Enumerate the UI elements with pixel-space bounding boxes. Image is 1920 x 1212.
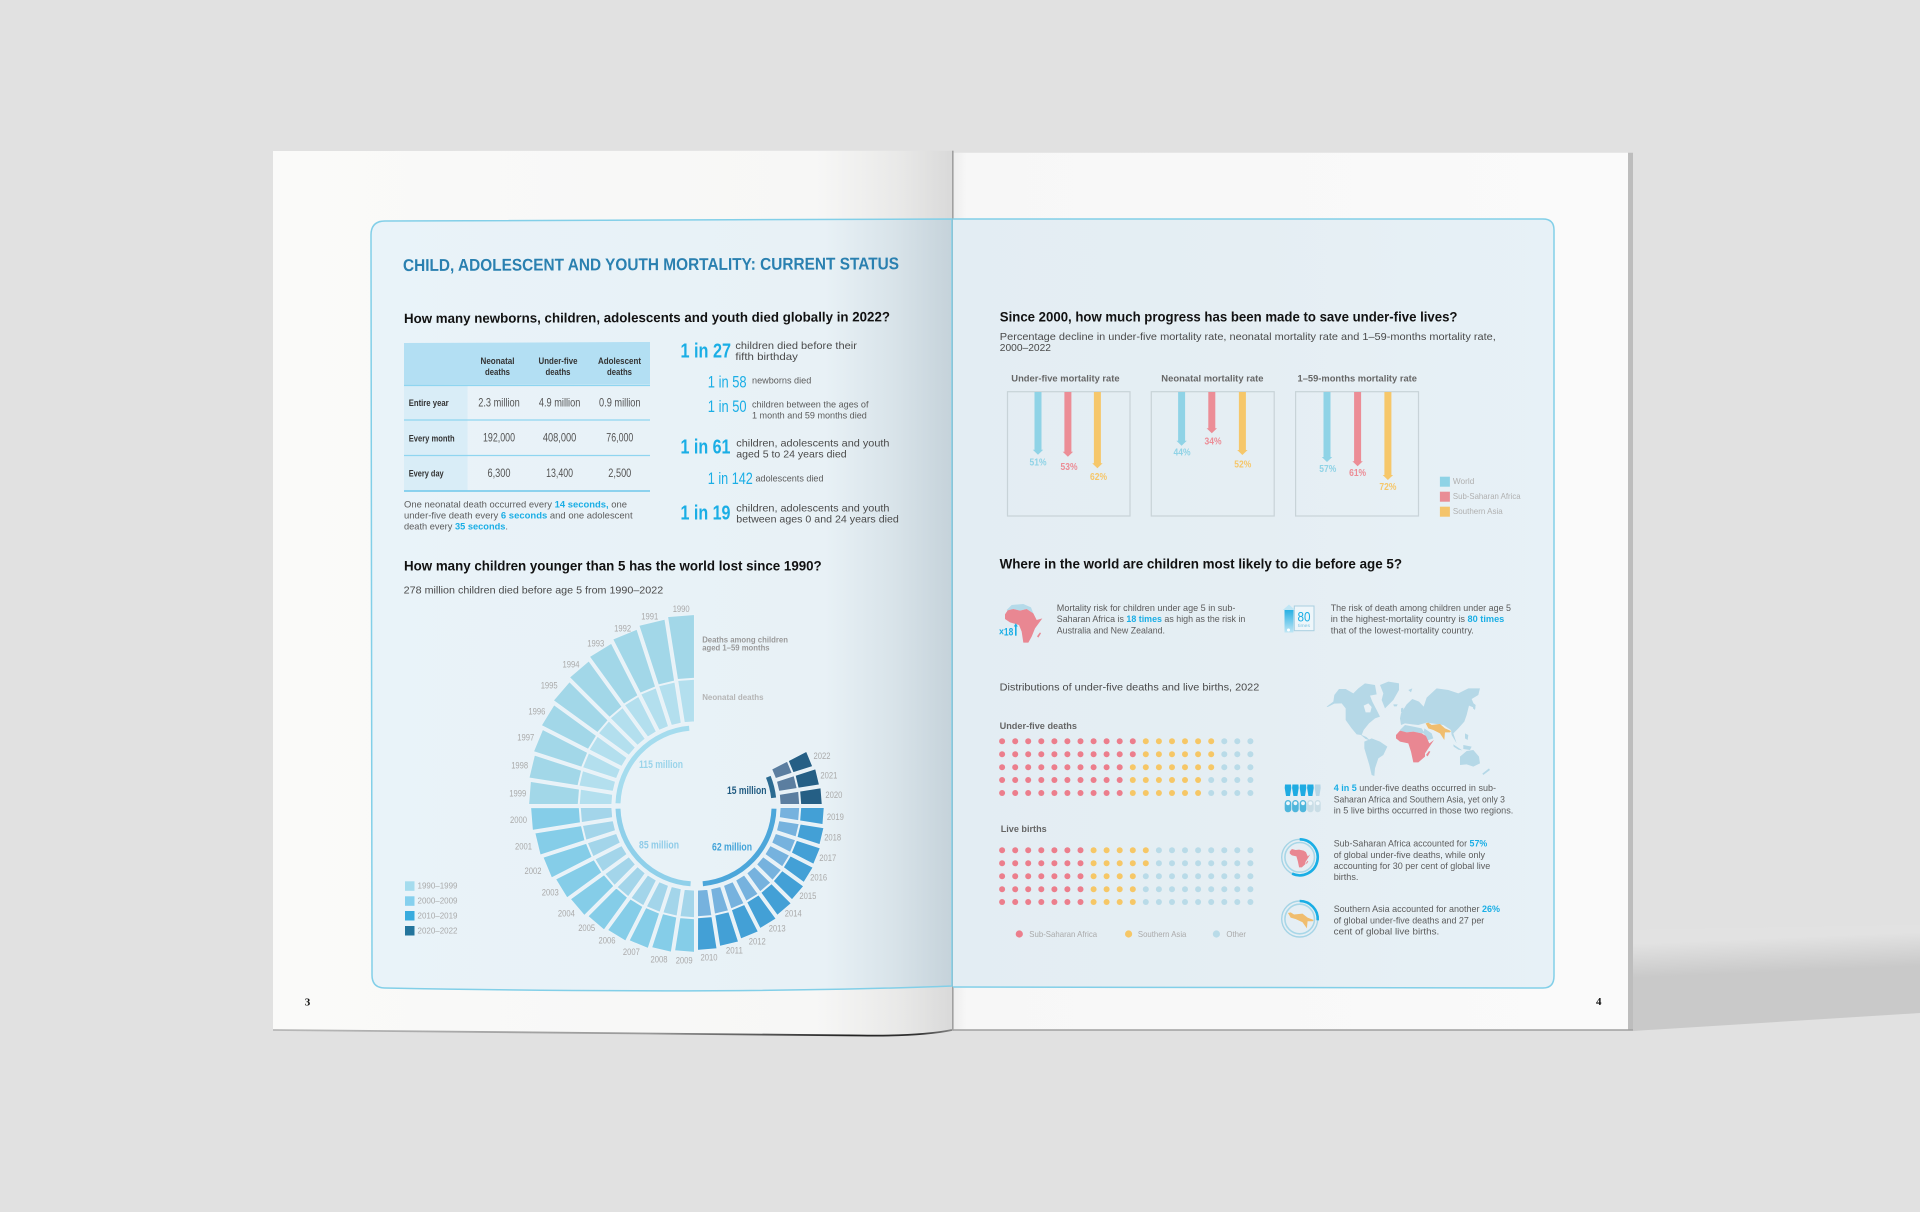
stats: 1 in N list: children died before their: [735, 340, 857, 352]
right page: [953, 153, 1633, 1030]
radial chart: year labels: 1994: [562, 659, 580, 669]
radial chart: year labels: 2005: [578, 923, 595, 933]
radial chart: 1990s: [529, 615, 703, 811]
legend: decades: 2020–2022: [418, 926, 458, 936]
radial chart: year labels: 2009: [676, 956, 693, 966]
radial chart: year labels: 1998: [511, 761, 528, 771]
heading: where in the world: Where in the world are children most likely to die before age 5?: [1000, 556, 1402, 571]
text: 57%: Sub-Saharan Africa accounted for 57%: [1334, 839, 1488, 850]
table: deaths: deaths: [546, 367, 570, 378]
arrow chart: under-five mortality rate: Under-five mortality rate: [1011, 373, 1120, 384]
text: 18 times: Mortality risk for children under age 5 in sub-: [1057, 603, 1235, 614]
legend: regions: Sub-Saharan Africa: [1453, 491, 1521, 501]
radial chart: year labels: 1992: [614, 623, 631, 633]
radial chart: year labels: 1996: [528, 706, 545, 716]
arrow chart: 1-59-months mortality rate: 72%: [1379, 481, 1397, 493]
text: 57%: accounting for 30 per cent of global live: [1334, 861, 1490, 872]
legend: decades: 1990–1999: [418, 881, 458, 891]
arrow chart: 1-59-months mortality rate: 1–59-months mortality rate: [1298, 373, 1417, 384]
table note: death every 35 seconds.: [404, 521, 508, 532]
legend: decades: 2010–2019: [418, 911, 458, 921]
icon: 80 times: 80: [1298, 609, 1311, 625]
radial chart: decade totals: 15 million: [727, 785, 767, 797]
radial chart: 2000s: [531, 801, 699, 952]
arrow chart: 1-59-months mortality rate: 57%: [1319, 463, 1337, 475]
table: deaths: 0.9 million: [599, 396, 641, 410]
radial chart: year labels: 2021: [820, 770, 837, 780]
text: 26%: cent of global live births.: [1334, 926, 1439, 937]
radial chart: year labels: 2014: [785, 908, 802, 918]
legend: dot chart: [1016, 929, 1246, 939]
text: 80 times: [1331, 603, 1511, 636]
subheading: percentage decline: [1000, 331, 1496, 354]
radial chart: series labels: Neonatal deaths: [702, 692, 764, 702]
table note: One neonatal death occurred every 14 seconds, one: [404, 499, 627, 510]
stats: 1 in N list: newborns died: [752, 375, 811, 386]
arrow chart: neonatal mortality rate: [1151, 373, 1274, 516]
radial chart: year labels: 2022: [814, 751, 830, 761]
radial chart: year labels: 2016: [810, 873, 827, 883]
subheading: percentage decline: Percentage decline in under-five mortality rate, neonatal mortality rate and 1–59-months mortality rate,: [1000, 331, 1496, 343]
arrow chart: 1-59-months mortality rate: [1296, 373, 1418, 516]
radial chart: year labels: 1991: [641, 612, 658, 622]
radial chart: decade totals: 62 million: [712, 842, 752, 854]
arrow chart: neonatal mortality rate: 52%: [1234, 458, 1252, 470]
radial chart: year labels: 2010: [700, 952, 718, 962]
table: deaths: deaths: [607, 367, 632, 378]
radial chart: series labels: [702, 635, 788, 702]
legend: dot chart: Sub-Saharan Africa: [1029, 929, 1097, 939]
table note: [404, 499, 633, 532]
stats: 1 in N list: 1 in 142: [708, 469, 753, 488]
left page: [273, 151, 954, 1036]
icon: donut 26%: [1282, 901, 1318, 937]
table: deaths: Every month: [409, 434, 455, 445]
arrow chart: under-five mortality rate: 62%: [1090, 471, 1108, 483]
text: 26%: of global under-five deaths and 27 per: [1334, 915, 1484, 926]
text: 80 times: The risk of death among children under age 5: [1331, 603, 1511, 614]
icon: 80 times: [1283, 604, 1314, 632]
stats: 1 in N list: 1 in 27: [680, 340, 731, 362]
stats: 1 in N list: children, adolescents and youth: [736, 503, 890, 515]
radial chart: decade arcs: [618, 728, 774, 884]
subheading: distributions: Distributions of under-five deaths and live births, 2022: [1000, 681, 1259, 693]
table: deaths: deaths: [485, 367, 510, 378]
stats: 1 in N list: children, adolescents and youth: [736, 437, 890, 449]
radial chart: year labels: 2004: [558, 908, 575, 918]
stats: 1 in N list: 1 in 50: [708, 397, 747, 416]
radial chart: series labels: aged 1–59 months: [702, 643, 770, 653]
table note: under-five death every 6 seconds and one adolescent: [404, 510, 633, 521]
radial chart: year labels: 1993: [587, 638, 604, 648]
text: 18 times: Saharan Africa is 18 times as high as the risk in: [1057, 614, 1245, 625]
text: 4 in 5: 4 in 5 under-five deaths occurred in sub-: [1334, 783, 1496, 794]
panel: left page background: [371, 219, 952, 991]
text: 80 times: in the highest-mortality country is 80 times: [1331, 614, 1504, 625]
arrow chart: neonatal mortality rate: 34%: [1204, 435, 1222, 447]
table: deaths: Entire year: [409, 398, 449, 409]
radial chart: decade totals: 85 million: [639, 840, 679, 852]
radial chart: year labels: 2006: [598, 936, 616, 946]
stats: 1 in N list: between ages 0 and 24 years died: [736, 514, 899, 526]
table: deaths: 76,000: [606, 431, 634, 445]
label: live births: Live births: [1001, 824, 1047, 835]
stats: 1 in N list: 1 in 19: [680, 502, 730, 524]
table: deaths: Adolescent: [598, 356, 642, 367]
heading: children lost: How many children younger than 5 has the world lost since 1990?: [404, 559, 822, 574]
table: deaths: [404, 342, 650, 491]
icon: Africa times 18: ×18: [999, 627, 1013, 639]
stats: 1 in N list: 1 month and 59 months died: [752, 411, 867, 422]
table: deaths: 6,300: [488, 466, 511, 480]
radial chart: year labels: 2019: [827, 812, 844, 822]
arrow chart: 1-59-months mortality rate: 61%: [1349, 467, 1367, 479]
arrow chart: under-five mortality rate: 53%: [1060, 461, 1078, 473]
text: 26%: [1334, 904, 1501, 937]
subheading: 278 million: 278 million children died before age 5 from 1990–2022: [404, 584, 663, 596]
stats: 1 in N list: 1 in 61: [680, 436, 730, 458]
legend: decades: [405, 881, 458, 936]
text: 57%: of global under-five deaths, while only: [1334, 850, 1485, 861]
heading: progress: Since 2000, how much progress has been made to save under-five lives?: [1000, 310, 1458, 325]
legend: regions: Southern Asia: [1453, 506, 1503, 516]
table: deaths: Every day: [409, 469, 444, 480]
text: 18 times: [1057, 603, 1245, 636]
label: under-five deaths: Under-five deaths: [1000, 721, 1077, 732]
radial chart: decade totals: 115 million: [639, 759, 683, 771]
table: deaths: 4.9 million: [539, 396, 580, 410]
arrow chart: neonatal mortality rate: 44%: [1174, 447, 1191, 459]
table: deaths: 192,000: [483, 431, 515, 445]
subheading: percentage decline: 2000–2022: [1000, 342, 1051, 354]
radial chart: year labels: 2001: [515, 841, 532, 851]
radial chart: year labels: 2012: [749, 936, 766, 946]
panel: right page background: [953, 219, 1554, 988]
stats: 1 in N list: fifth birthday: [735, 351, 799, 363]
dot chart: live births: [999, 847, 1253, 905]
radial chart: year labels: 2013: [769, 924, 786, 934]
radial chart: decade totals: [639, 759, 767, 854]
radial chart: 2020s: [770, 751, 822, 808]
text: 26%: Southern Asia accounted for another 26%: [1334, 904, 1501, 915]
arrow chart: under-five mortality rate: [1008, 373, 1130, 516]
heading: newborns: How many newborns, children, adolescents and youth died globally in 2022?: [404, 309, 890, 326]
radial chart: year labels: 1990: [673, 604, 690, 614]
radial chart: year labels: 2020: [825, 790, 842, 800]
stats: 1 in N list: [680, 340, 899, 526]
table: deaths: 2.3 million: [478, 396, 520, 410]
legend: regions: [1440, 476, 1521, 517]
radial chart: year labels: 2011: [726, 946, 743, 956]
radial chart: year labels: 1997: [517, 732, 534, 742]
radial chart: year labels: [509, 604, 844, 966]
radial chart: year labels: 2003: [542, 888, 559, 898]
icon: 80 times: times: [1298, 623, 1311, 628]
text: 4 in 5: in 5 live births occurred in those two regions.: [1334, 805, 1513, 816]
legend: dot chart: Other: [1226, 929, 1246, 939]
icon: Africa times 18: [999, 604, 1042, 643]
title: CHILD, ADOLESCENT AND YOUTH MORTALITY: CURRENT STATUS: [403, 254, 899, 275]
table: deaths: Under-five: [538, 356, 578, 367]
radial chart: year labels: 2017: [819, 853, 836, 863]
stats: 1 in N list: children between the ages of: [752, 400, 869, 411]
radial chart: year labels: 2000: [510, 815, 527, 825]
dot chart: under-five deaths: [999, 738, 1253, 796]
legend: decades: 2000–2009: [418, 896, 458, 906]
radial chart: year labels: 1995: [541, 680, 558, 690]
text: 4 in 5: [1334, 783, 1513, 816]
radial chart: year labels: 2002: [524, 866, 542, 876]
radial chart: series labels: Deaths among children: [702, 635, 788, 645]
stats: 1 in N list: 1 in 58: [708, 372, 747, 391]
table: deaths: Neonatal: [480, 356, 514, 367]
radial chart: year labels: 2018: [824, 833, 841, 843]
radial chart: year labels: 2007: [623, 947, 640, 957]
stats: 1 in N list: adolescents died: [756, 474, 824, 485]
legend: regions: World: [1453, 476, 1475, 486]
radial chart: year labels: 2015: [799, 891, 816, 901]
book shadow: [1633, 925, 1920, 1031]
arrow chart: neonatal mortality rate: Neonatal mortality rate: [1161, 373, 1264, 384]
text: 57%: [1334, 839, 1490, 883]
table: deaths: 13,400: [546, 466, 573, 480]
legend: dot chart: Southern Asia: [1138, 929, 1187, 939]
radial chart: year labels: 1999: [509, 789, 526, 799]
text: 4 in 5: Saharan Africa and Southern Asia, yet only 3: [1334, 794, 1505, 805]
radial chart: 2010s: [693, 804, 824, 950]
table: deaths: 408,000: [543, 431, 577, 445]
icon: 4 in 5 pictogram: [1285, 784, 1321, 812]
text: 57%: births.: [1334, 872, 1358, 883]
page number 4: 4: [1596, 996, 1602, 1008]
icon: donut 57%: [1282, 839, 1318, 875]
radial chart: year labels: 2008: [650, 954, 668, 964]
stats: 1 in N list: aged 5 to 24 years died: [736, 448, 847, 460]
text: 80 times: that of the lowest-mortality country.: [1331, 625, 1474, 636]
text: 18 times: Australia and New Zealand.: [1057, 625, 1165, 636]
table: deaths: 2,500: [608, 466, 632, 480]
arrow chart: under-five mortality rate: 51%: [1030, 456, 1047, 468]
world map: [1327, 682, 1490, 776]
page number 3: 3: [305, 996, 311, 1008]
